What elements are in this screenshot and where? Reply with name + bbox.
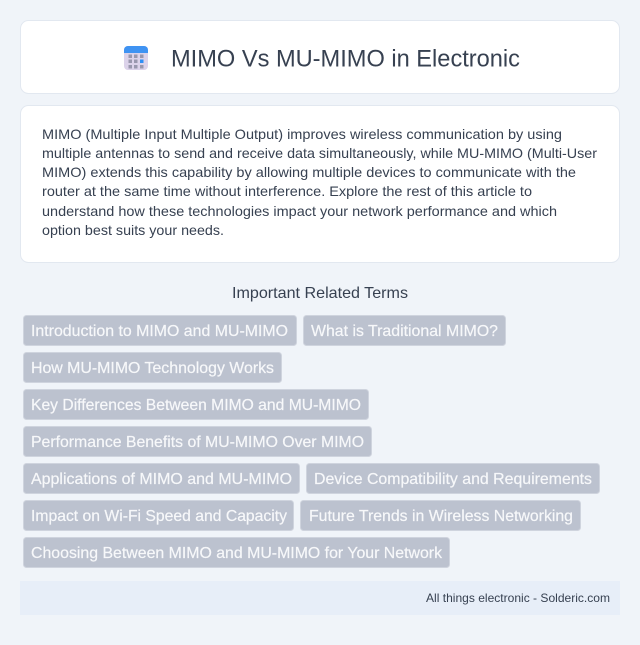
heading: related terms: Important Related Terms — [232, 285, 408, 302]
text block: description: understand how these technologies impact your network performance and which — [42, 203, 557, 219]
footer — [20, 581, 620, 615]
text block: description — [42, 126, 597, 238]
tag list — [24, 316, 600, 568]
text block: description: multiple antennas to send and receive data simultaneously, while MU-MIMO (Multi-User — [42, 145, 597, 161]
text block: description: MIMO) extends this capability by allowing multiple devices to communicate with the — [42, 164, 576, 180]
panel: title header — [20, 20, 620, 94]
tag — [24, 500, 294, 530]
tag — [24, 390, 368, 420]
tag: Impact on Wi-Fi Speed and Capacity — [31, 508, 287, 525]
tag: What is Traditional MIMO? — [311, 323, 498, 340]
tag: Choosing Between MIMO and MU-MIMO for Your Network — [31, 545, 443, 562]
tag — [306, 464, 600, 494]
tag: Introduction to MIMO and MU-MIMO — [31, 323, 288, 340]
tag: How MU-MIMO Technology Works — [31, 360, 274, 377]
title: MIMO Vs MU-MIMO in Electronic — [171, 46, 520, 72]
panel: description — [20, 106, 620, 262]
tag: Future Trends in Wireless Networking — [309, 508, 573, 525]
text block: description: MIMO (Multiple Input Multiple Output) improves wireless communication by using — [42, 126, 562, 142]
tag — [24, 464, 300, 494]
tag: Key Differences Between MIMO and MU-MIMO — [31, 397, 361, 414]
tag: Device Compatibility and Requirements — [314, 471, 592, 488]
tag — [304, 316, 506, 346]
icon: calendar — [124, 46, 148, 70]
text block: description: option best suits your needs. — [42, 222, 224, 238]
tag — [24, 538, 450, 568]
tag — [24, 352, 282, 382]
tag: Applications of MIMO and MU-MIMO — [31, 471, 292, 488]
tag — [24, 426, 372, 456]
tag — [300, 500, 580, 530]
tag — [24, 316, 296, 346]
footer credit: All things electronic - Solderic.com — [426, 591, 610, 605]
tag: Performance Benefits of MU-MIMO Over MIMO — [31, 434, 364, 451]
text block: description: router at the same time without interference. Explore the rest of this article to — [42, 183, 532, 199]
